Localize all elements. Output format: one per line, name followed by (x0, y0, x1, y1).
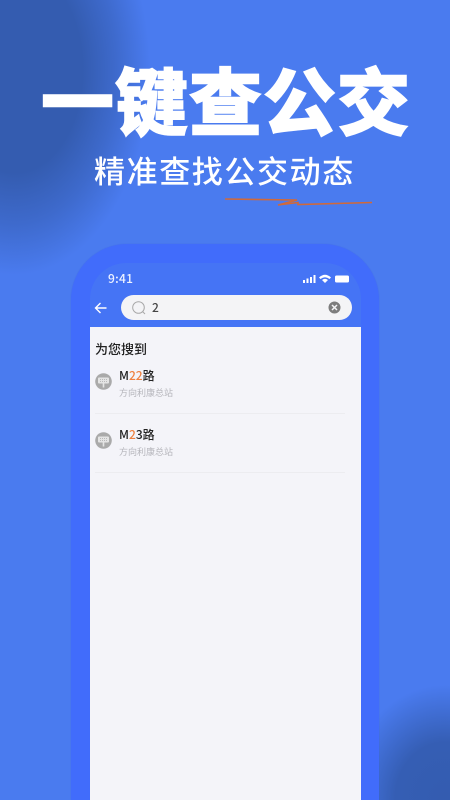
direction: 方向利康总站 (119, 386, 173, 399)
results panel (90, 327, 361, 800)
search icon (132, 301, 146, 314)
title: 一键查公交 (41, 45, 411, 151)
back arrow (94, 302, 106, 314)
result item: M23 (95, 426, 345, 473)
result item: M22 (95, 367, 345, 414)
search text: 2 (152, 299, 159, 316)
bus stop icon (95, 432, 112, 449)
phone screen (90, 263, 361, 800)
status icons (303, 274, 349, 283)
status bar time: 9:41 (108, 270, 133, 287)
subtitle: 精准查找公交动态 (94, 147, 355, 192)
route name: M23路 (119, 426, 155, 443)
direction: 方向利康总站 (119, 445, 173, 458)
route name: M22路 (119, 367, 155, 384)
search bar (121, 295, 352, 320)
clear icon (328, 302, 340, 314)
results heading: 为您搜到 (95, 339, 147, 358)
bus stop icon (95, 373, 112, 390)
phone mockup (71, 244, 379, 800)
decorative orange underline (225, 198, 372, 206)
